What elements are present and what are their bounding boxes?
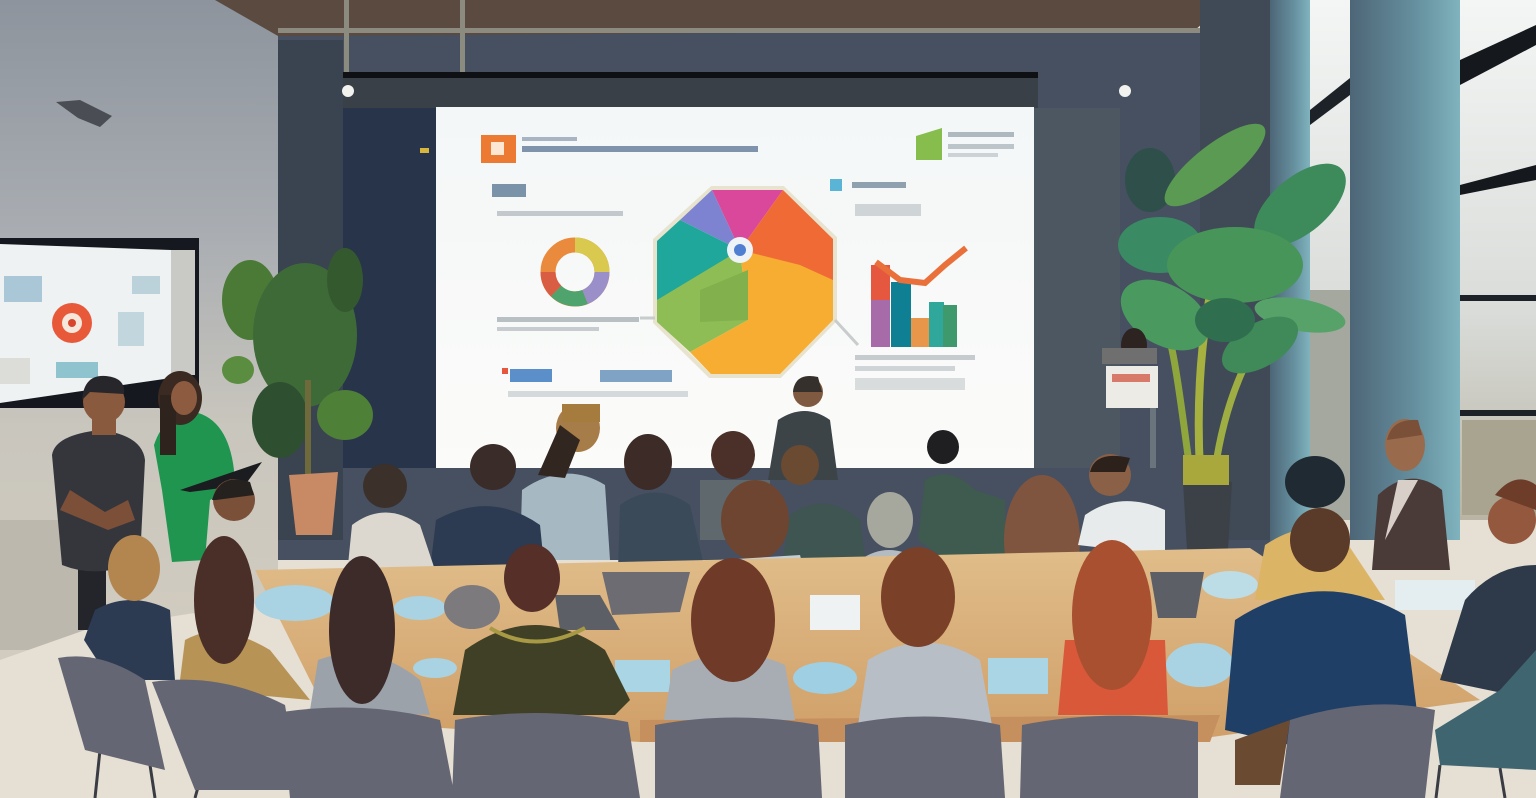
person: right edge seated <box>1440 479 1536 700</box>
projected slide <box>436 107 1034 468</box>
person: red hair and coral shirt <box>1058 540 1168 715</box>
person: woman at screen in blue shirt <box>520 404 610 560</box>
slide logo <box>481 135 516 163</box>
slide title bars <box>522 146 758 152</box>
person: short auburn grey top <box>858 547 992 725</box>
right plant <box>1108 111 1360 550</box>
person: man in dark cap <box>1255 456 1385 600</box>
standing people on the left <box>52 371 262 630</box>
slide left heading <box>492 184 526 197</box>
slide text blocks <box>855 355 975 360</box>
slide right legend <box>830 179 842 191</box>
left wall TV <box>0 238 199 408</box>
bar chart with trend line <box>871 248 966 347</box>
person: presenter at screen <box>768 376 838 480</box>
wall camera <box>56 100 112 127</box>
person: blonde man <box>84 535 175 680</box>
conference table <box>255 548 1480 742</box>
table papers <box>255 585 335 621</box>
person: man with tablet <box>180 462 262 521</box>
right side standing people <box>1255 419 1536 700</box>
slide green badge <box>916 128 942 160</box>
person: large man in blue jacket <box>1225 508 1418 785</box>
person: woman in green dress <box>154 371 234 562</box>
person: man in dark shirt <box>52 376 145 630</box>
person: long dark hair grey top <box>310 556 430 715</box>
person: long dark hair left <box>180 536 310 700</box>
chair legs <box>95 750 1505 798</box>
small donut chart <box>548 245 602 299</box>
person: olive sweater <box>453 544 630 715</box>
laptops on the table <box>444 572 1204 630</box>
person: long auburn grey top <box>664 558 795 720</box>
presenter at podium <box>1102 328 1158 468</box>
left plant with pot <box>222 248 373 535</box>
person: man in brown suit <box>1372 419 1450 570</box>
standing presenter and middle audience row <box>348 376 1165 630</box>
front row chairs <box>58 650 1536 798</box>
person: seated back row <box>430 506 545 575</box>
large octagon pie chart <box>655 188 835 376</box>
front row seated people <box>84 508 1418 785</box>
projection screen frame <box>342 0 1131 468</box>
